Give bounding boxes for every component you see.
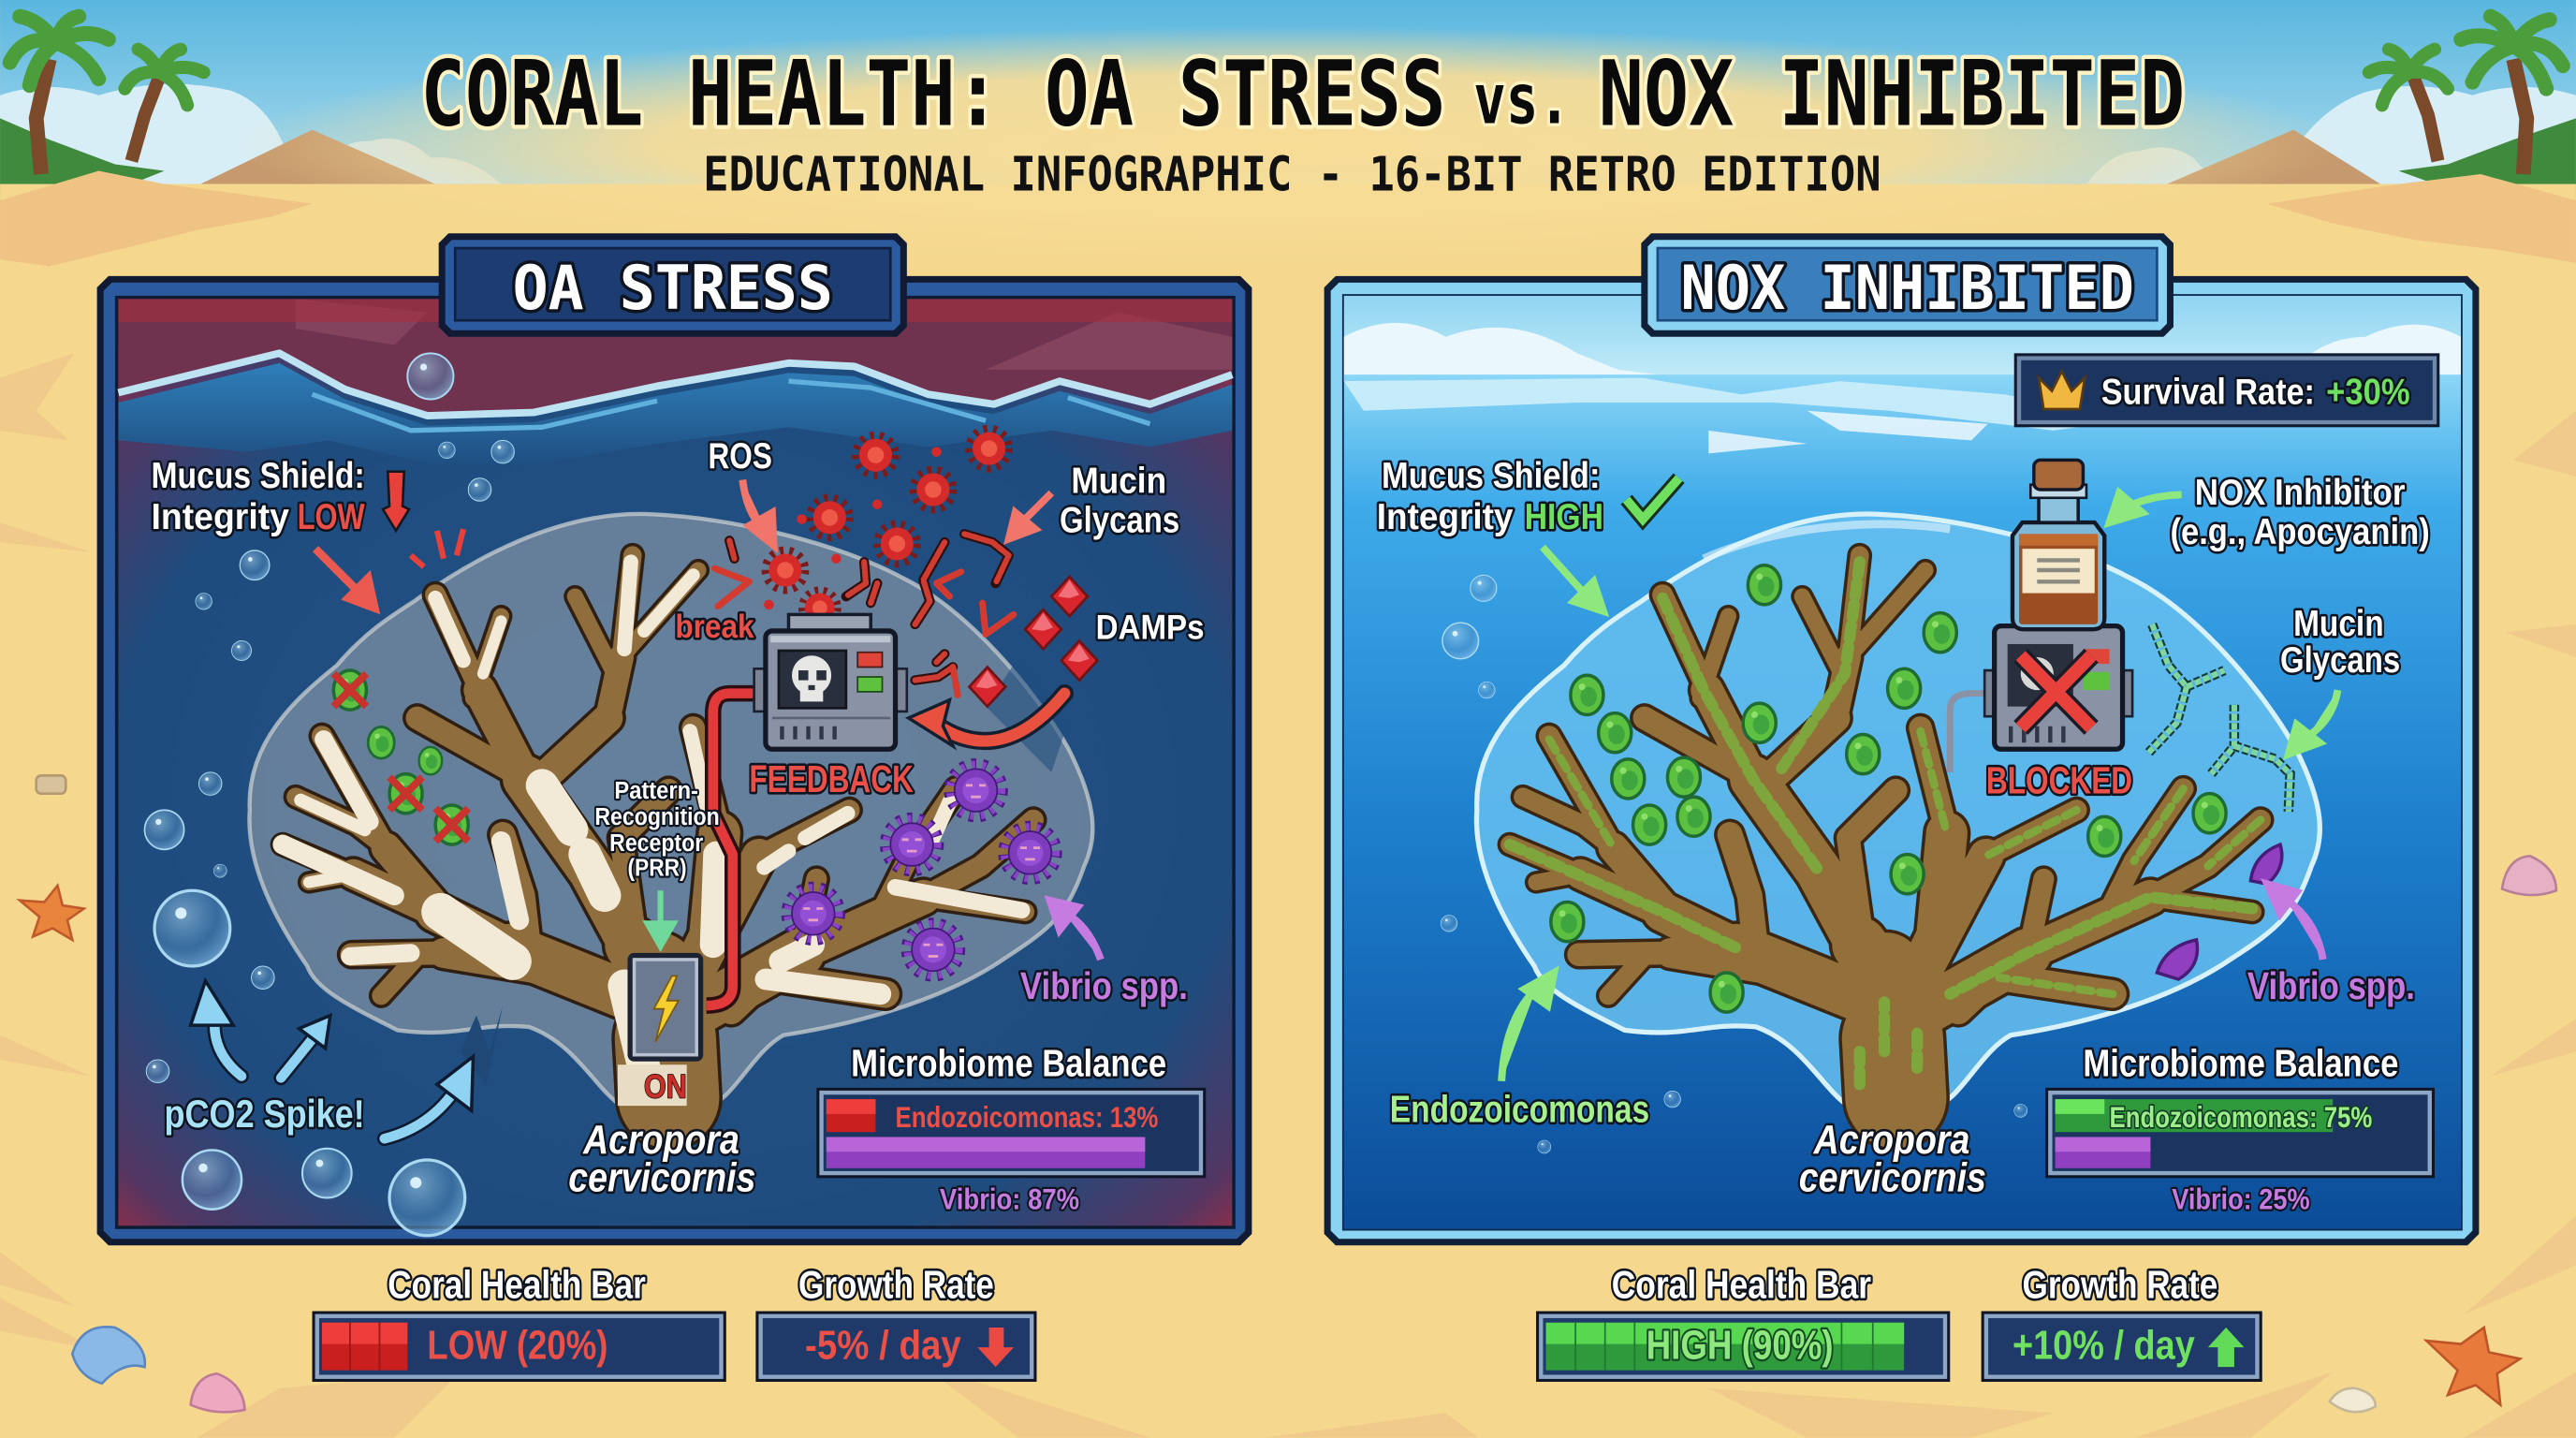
label: pattern recognition receptor: (PRR) (627, 853, 687, 881)
Vibrio cells (2157, 844, 2282, 979)
icon: lightning (654, 976, 679, 1042)
survival rate badge: +30% (2326, 373, 2410, 413)
icon: down arrow (977, 1328, 1014, 1367)
label: pattern recognition receptor: Recognition (594, 802, 720, 830)
tab: OA stress (439, 233, 907, 337)
label: pattern recognition receptor: Receptor (609, 829, 703, 857)
icon: red X (2021, 655, 2091, 727)
label: mucus shield low: Mucus Shield: (152, 456, 365, 496)
title: NOX INHIBITED (1599, 40, 2185, 146)
sea waves (118, 353, 1232, 463)
arrow: endozoicomonas (1501, 973, 1554, 1081)
icon: white shell (2330, 1388, 2376, 1412)
stat: growth rate left: Growth Rate (798, 1262, 994, 1306)
arrows: pCO2 rising (191, 981, 474, 1138)
label: mucin glycans: Glycans (1060, 501, 1179, 541)
arrow: to mucus layer (1543, 547, 1603, 611)
icon: starfish left (20, 886, 84, 940)
label: mucus shield low: LOW (298, 497, 365, 537)
label: pattern recognition receptor: Pattern- (614, 776, 698, 804)
red signal pipe (707, 694, 759, 1005)
arrow: to mucus layer (315, 549, 374, 608)
panel: NOX inhibited (1325, 276, 2479, 1245)
dying symbionts with crosses (333, 670, 468, 844)
label: DAMPs: DAMPs (1096, 609, 1204, 647)
mucus shield blob (1476, 514, 2320, 1106)
microbiome balance gauge: Endozoicomonas: 13% (896, 1100, 1158, 1134)
tab: NOX inhibited: NOX INHIBITED (1680, 254, 2134, 324)
arrow: vibrio (1050, 901, 1101, 960)
label: NOX inhibitor (2170, 473, 2430, 552)
label: pattern recognition receptor (594, 776, 720, 881)
label: mucin glycans: Glycans (2280, 640, 2400, 681)
label: NOX inhibitor: (e.g., Apocyanin) (2170, 512, 2430, 552)
symbionts: Endozoicomonas cells (1551, 565, 2226, 1012)
coral: bleached branching coral (283, 555, 1033, 1106)
sea (1344, 374, 2461, 1229)
icon: crown (2039, 372, 2085, 409)
arrow: feedback curve (909, 694, 1064, 746)
ROS radicals (764, 431, 1007, 609)
label: species: Acropora (582, 1117, 739, 1163)
label: switch on: ON (644, 1068, 687, 1105)
survival rate badge: Survival Rate: (2101, 373, 2315, 413)
stat: coral health right: Coral Health Bar (1612, 1262, 1871, 1306)
label: pCO2 spike: pCO2 Spike! (165, 1092, 365, 1136)
arrow: vibrio (2267, 884, 2323, 960)
title: vs. (1473, 61, 1571, 140)
bubbles (145, 353, 514, 1236)
stat: coral health left (313, 1262, 726, 1382)
NOX machine active with skull (754, 592, 907, 749)
microbiome balance gauge (816, 1042, 1206, 1216)
label: vibrio: Vibrio spp. (2247, 964, 2415, 1007)
label: mucus shield high: Mucus Shield: (1382, 456, 1600, 496)
label: NOX inhibitor: NOX Inhibitor (2195, 473, 2405, 513)
label: species: cervicornis (568, 1154, 755, 1200)
arrow: NOX inhibitor (2110, 493, 2182, 522)
microbiome balance gauge (2045, 1042, 2435, 1216)
microbiome balance gauge: Vibrio: 25% (2172, 1182, 2310, 1216)
sky and clouds (1344, 296, 2461, 381)
label: ROS: ROS (708, 436, 772, 477)
panel: OA stress (97, 276, 1251, 1245)
mucin glycans chains (2149, 624, 2291, 812)
label: species: Acropora (1813, 1117, 1969, 1163)
stat: coral health right: HIGH (90%) (1647, 1322, 1834, 1368)
purple bar (827, 1137, 1145, 1168)
stat: growth rate right: Growth Rate (2022, 1262, 2217, 1306)
Vibrio viruses (788, 766, 1055, 975)
tab: OA stress: OA STRESS (513, 254, 833, 324)
red bar (827, 1099, 875, 1132)
icon: up arrow (2208, 1328, 2244, 1367)
icon: pink shell (191, 1373, 245, 1412)
stat: growth rate left (755, 1262, 1036, 1382)
icon: palm trees right (2369, 17, 2563, 174)
arrow: mucin glycans (2289, 690, 2337, 755)
DAMPs diamonds (970, 577, 1097, 707)
stat: coral health left: Coral Health Bar (388, 1262, 646, 1306)
arrow: ROS (742, 479, 774, 546)
label: mucus shield high (1377, 456, 1679, 537)
label: species (1799, 1117, 1986, 1200)
icon: inhibitor bottle (2012, 460, 2104, 629)
microbiome balance gauge: Endozoicomonas: 75% (2110, 1100, 2372, 1134)
purple bar (2056, 1137, 2150, 1168)
microbiome balance gauge: Vibrio: 87% (940, 1182, 1079, 1216)
label: break: break (675, 609, 754, 645)
bubbles (1441, 575, 2027, 1153)
stat: growth rate right (1982, 1262, 2262, 1382)
label: species (568, 1117, 755, 1200)
icon: green check (1627, 478, 1679, 520)
icon: exclamation (383, 472, 409, 531)
label: species: cervicornis (1799, 1154, 1986, 1200)
arrow: receptor (648, 890, 674, 946)
icon: palm trees left (10, 17, 204, 174)
stat: coral health left: LOW (20%) (427, 1322, 607, 1368)
label: mucus shield low: Integrity (152, 497, 289, 537)
label: mucin glycans (2280, 604, 2400, 681)
label: mucin glycans (1060, 462, 1179, 541)
tab: NOX inhibited (1641, 233, 2174, 337)
stat: growth rate right: +10% / day (2012, 1322, 2195, 1368)
label: blocked: BLOCKED (1986, 759, 2132, 802)
icon: starfish right (2426, 1328, 2520, 1405)
microbiome balance gauge: Microbiome Balance (851, 1042, 1166, 1085)
label: vibrio: Vibrio spp. (1020, 964, 1188, 1007)
NOX machine blocked (1950, 626, 2132, 772)
subtitle: EDUCATIONAL INFOGRAPHIC - 16-BIT RETRO EDITION (703, 148, 1881, 203)
microbiome balance gauge: Microbiome Balance (2083, 1042, 2398, 1085)
icon: blue shell (72, 1327, 145, 1384)
coral: healthy branching coral (1510, 555, 2261, 1097)
stat: coral health right (1536, 1262, 1950, 1382)
survival rate badge (2014, 353, 2439, 427)
receptor switch (627, 953, 703, 1062)
icon: skull (792, 655, 831, 701)
label: mucus shield high: Integrity (1377, 497, 1514, 537)
title: CORAL HEALTH: OA STRESS (420, 40, 1445, 146)
arrow: mucin glycans (1009, 493, 1051, 539)
green bar (2056, 1099, 2333, 1132)
label: mucus shield high: HIGH (1525, 497, 1603, 537)
stormy surface sky (118, 299, 1232, 416)
label: feedback: FEEDBACK (749, 757, 914, 800)
mucus shield blob (249, 514, 1092, 1106)
stat: growth rate left: -5% / day (805, 1322, 961, 1368)
mucin glycan fragments (714, 534, 1014, 695)
label: mucus shield low (152, 456, 463, 566)
icon: pebble left (37, 775, 66, 794)
icon: pink shell right (2502, 856, 2556, 895)
label: mucin glycans: Mucin (2293, 604, 2384, 644)
label: endozoicomonas: Endozoicomonas (1390, 1088, 1649, 1131)
label: mucin glycans: Mucin (1071, 462, 1166, 502)
